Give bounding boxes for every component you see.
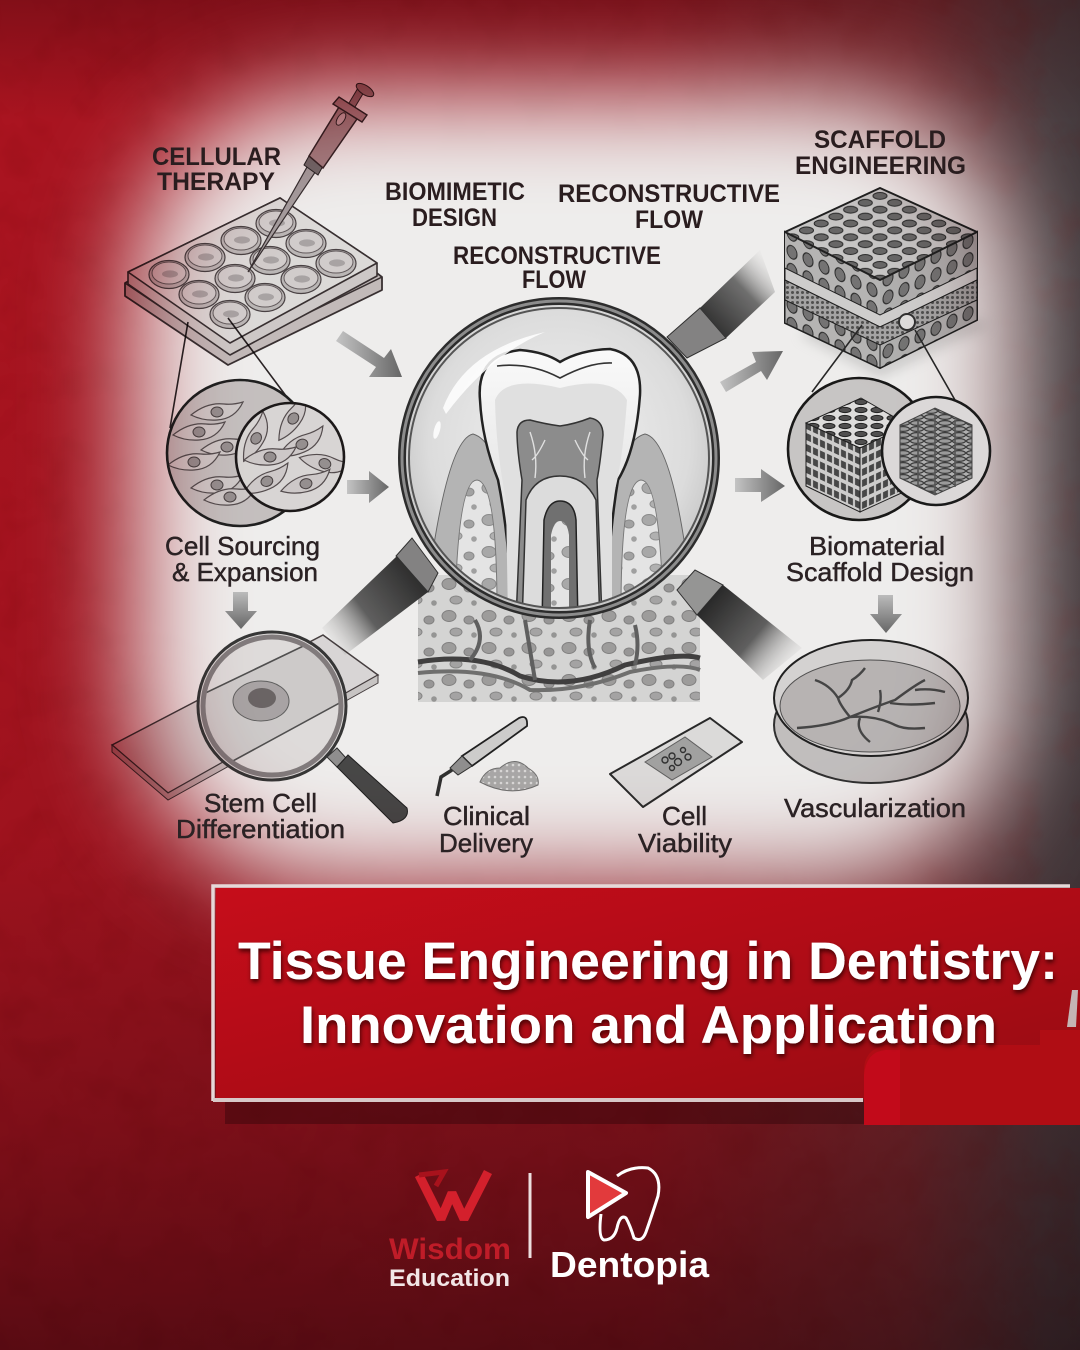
icon: cell viability slide: [610, 718, 742, 807]
panel: central magnifier with tooth: [322, 250, 802, 702]
title: Tissue Engineering in Dentistry:: [238, 932, 1058, 991]
banner: [213, 886, 1080, 1125]
heading: cellular therapy: CELLULAR: [152, 143, 281, 171]
label: stem cell differentiation: [176, 788, 345, 844]
bone base under the lens: [418, 575, 700, 702]
icon: clinical delivery tool: [437, 717, 538, 796]
lens rim: [402, 301, 716, 615]
label: cell sourcing: Cell Sourcing: [165, 531, 320, 561]
label: biomaterial scaffold design: [786, 531, 974, 587]
label: cell sourcing: [165, 531, 320, 587]
label: biomaterial scaffold design: Biomaterial: [809, 531, 945, 561]
panel: scaffold detail circle: [882, 397, 990, 505]
heading: reconstructive flow upper: FLOW: [635, 206, 703, 234]
vessels in bone: [418, 656, 700, 682]
magnifier handles: [322, 250, 802, 680]
title: [238, 932, 1058, 1055]
heading: biomimetic design: DESIGN: [412, 204, 497, 232]
panel: biomaterial scaffold circles: [788, 378, 930, 520]
arrow: lens to biomaterial: [735, 469, 785, 502]
panel: stem cell magnifier: [112, 626, 407, 823]
logo: Wisdom Education: Wisdom: [389, 1233, 511, 1266]
heading: cellular therapy: [152, 143, 281, 196]
label: clinical delivery: [439, 801, 533, 858]
arrow: biomaterial down: [870, 595, 902, 633]
heading: biomimetic design: BIOMIMETIC: [385, 178, 525, 206]
label: cell viability: Viability: [638, 828, 732, 858]
label: stem cell differentiation: Stem Cell: [204, 788, 317, 818]
label: clinical delivery: Delivery: [439, 828, 533, 858]
lens glare: [443, 332, 545, 414]
heading: reconstructive flow lower: FLOW: [522, 266, 586, 294]
heading: scaffold engineering: [795, 126, 966, 180]
label: biomaterial scaffold design: Scaffold Design: [786, 557, 974, 587]
pipette: [248, 160, 320, 272]
divider: [528, 1173, 532, 1258]
arrow: plate to lens: [336, 331, 402, 377]
heading: scaffold engineering: ENGINEERING: [795, 152, 966, 180]
arrow: cell sourcing down: [225, 592, 257, 629]
label: vascularization: Vascularization: [784, 793, 966, 823]
tooth and surrounding tissue: [434, 348, 684, 607]
wells: [149, 260, 189, 288]
logo: Dentopia: [550, 1168, 710, 1285]
label: clinical delivery: Clinical: [443, 801, 530, 831]
well plate: [125, 198, 382, 365]
icon: vascularized petri dish: [774, 640, 968, 783]
label: cell viability: [638, 801, 732, 858]
panel: scaffold block: [785, 188, 990, 400]
banner borders: [213, 886, 1070, 1101]
heading: cellular therapy: THERAPY: [157, 168, 275, 196]
panel: cell sourcing circles: [167, 318, 353, 526]
heading: biomimetic design: [385, 178, 525, 232]
heading: scaffold engineering: SCAFFOLD: [814, 126, 946, 154]
heading: reconstructive flow upper: RECONSTRUCTIVE: [558, 180, 780, 208]
arrow: lens to scaffold: [720, 351, 783, 392]
panel: well plate and pipette: [125, 81, 382, 365]
label: cell sourcing: & Expansion: [172, 557, 318, 587]
logo: Dentopia: Dentopia: [550, 1244, 710, 1285]
heading: reconstructive flow lower: [453, 242, 661, 294]
arrow: cells to lens: [347, 471, 389, 503]
title: Innovation and Application: [300, 996, 997, 1055]
logo: Wisdom Education: [389, 1172, 511, 1292]
label: stem cell differentiation: Differentiation: [176, 814, 345, 844]
logo: Wisdom Education: Education: [389, 1265, 510, 1292]
label: cell viability: Cell: [662, 801, 707, 831]
heading: reconstructive flow lower: RECONSTRUCTIVE: [453, 242, 661, 270]
lens: [402, 301, 716, 625]
heading: reconstructive flow upper: [558, 180, 780, 234]
